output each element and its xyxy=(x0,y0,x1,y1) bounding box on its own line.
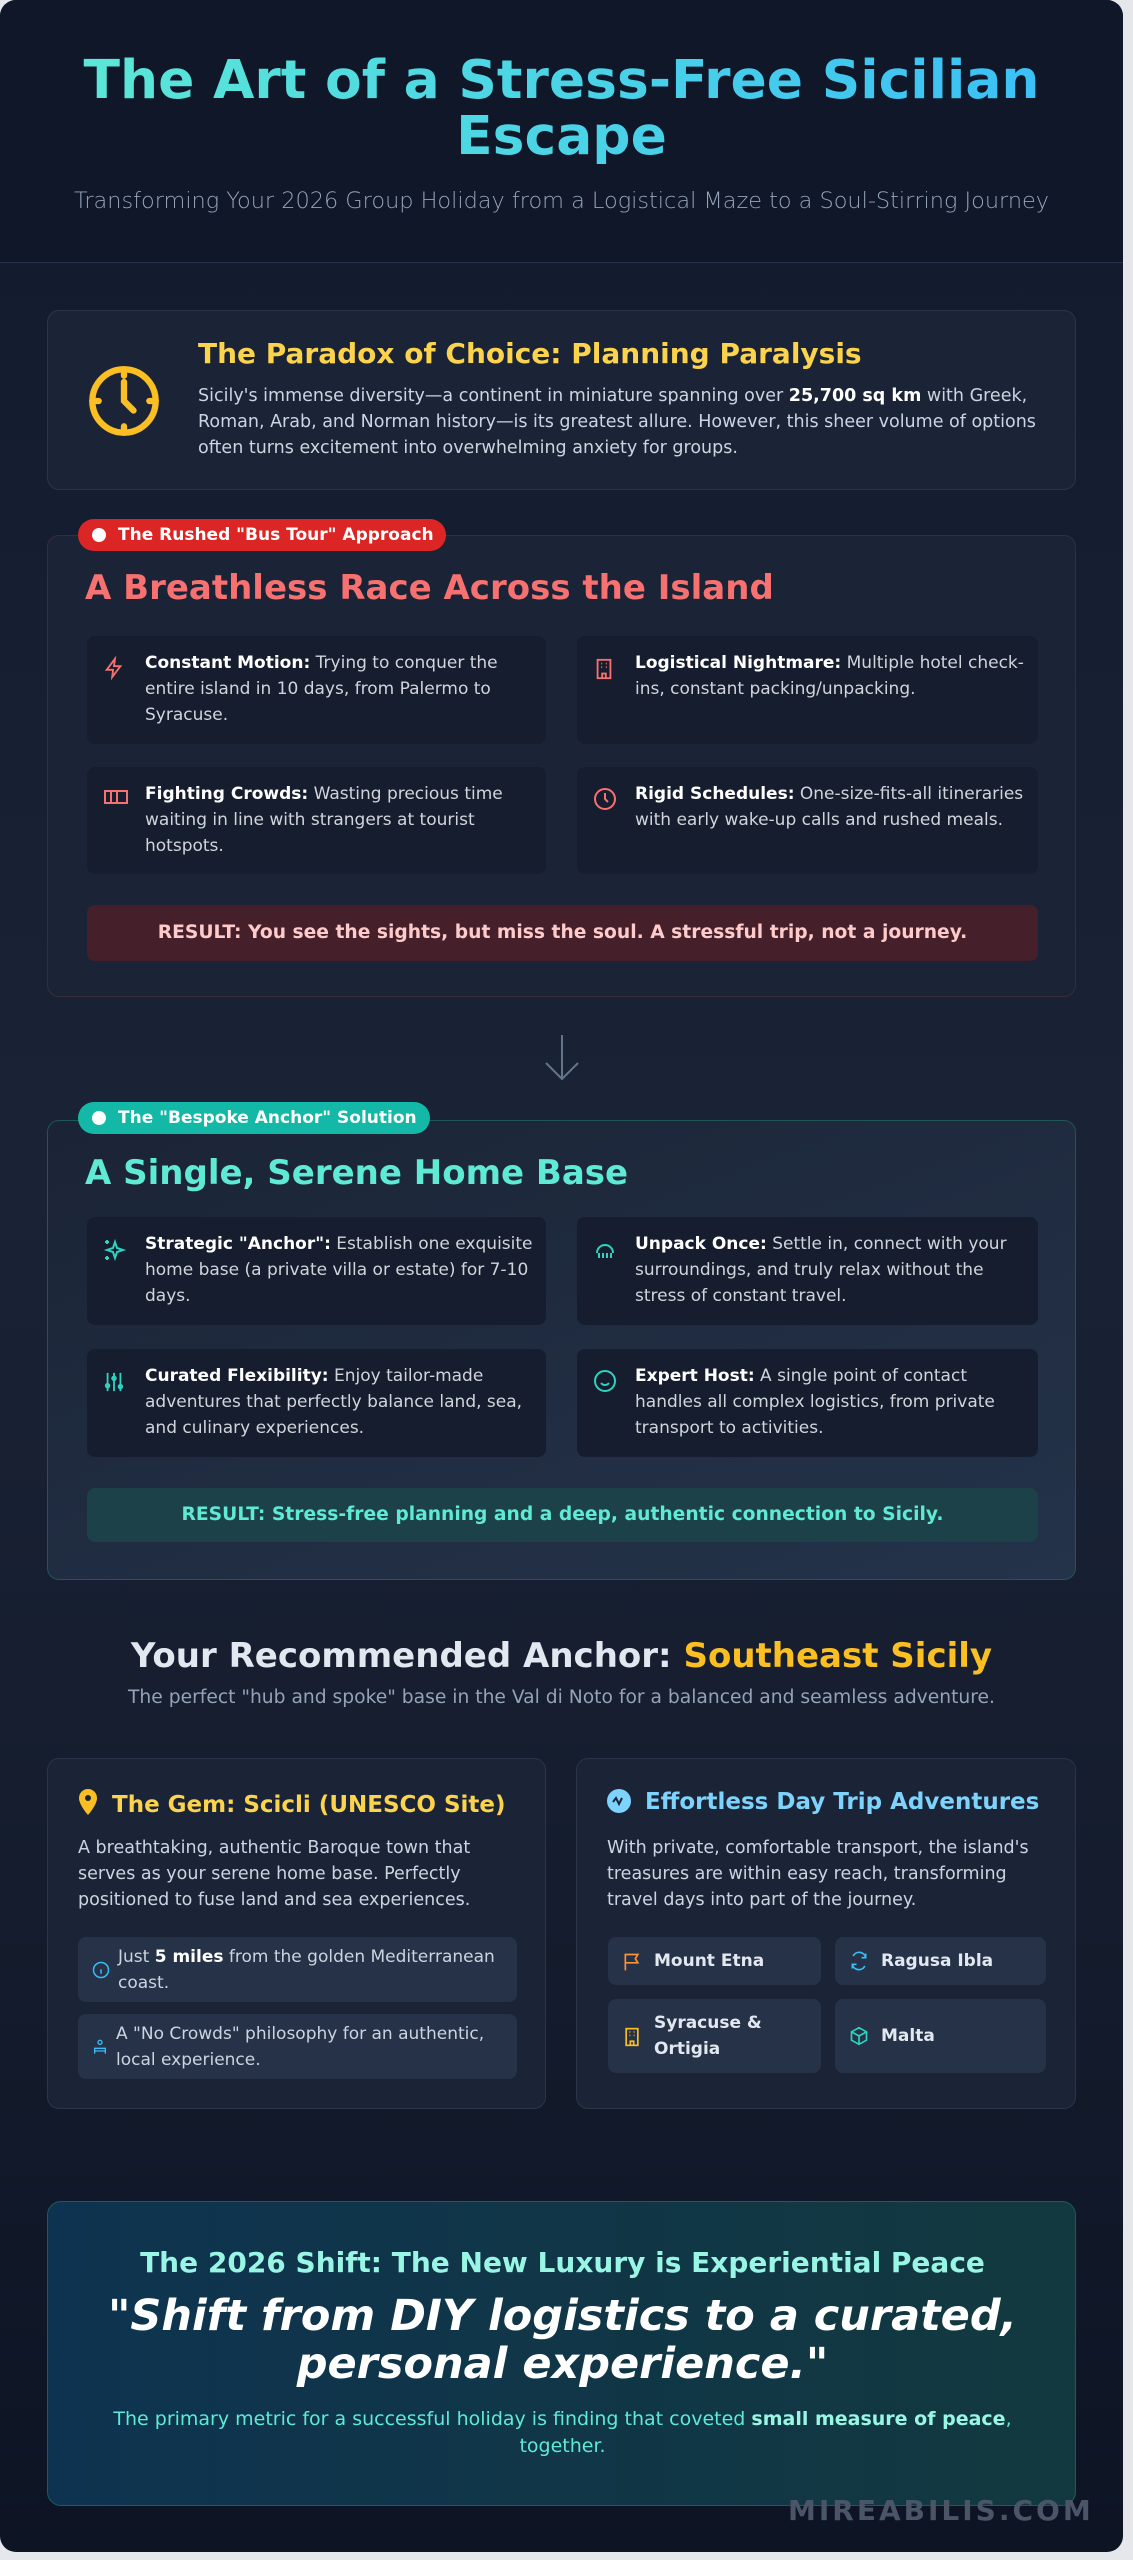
tile: mount etna: Mount Etna xyxy=(654,1951,764,1971)
title xyxy=(0,52,1123,164)
item: fighting crowds: Fighting Crowds: Wasting precious time waiting in line with strangers at tourist hotspots. xyxy=(145,784,503,856)
icon: sliders xyxy=(104,1372,124,1392)
icon: sparkles xyxy=(104,1239,126,1261)
quote: personal experience." xyxy=(297,2339,828,2389)
icon: bolt xyxy=(104,656,122,680)
item: strategic anchor: Strategic "Anchor": Establish one exquisite home base (a private villa or estate) for 7-10 days. xyxy=(145,1234,532,1306)
item: unpack once xyxy=(577,1217,1038,1325)
section heading: recommended anchor: Your Recommended Anchor: Southeast Sicily xyxy=(131,1636,992,1676)
panel: bus tour xyxy=(47,535,1076,997)
icon: clock xyxy=(594,788,616,810)
text: The primary metric for a successful holiday is finding that coveted small measure of peace, together. xyxy=(113,2408,1012,2457)
panel: the 2026 shift xyxy=(47,2201,1076,2506)
watermark: MIREABILIS.COM xyxy=(788,2494,1094,2527)
panel: day trips xyxy=(576,1758,1076,2109)
text: With private, comfortable transport, the island's treasures are within easy reach, transforming travel days into part of the journey. xyxy=(607,1838,1029,1910)
icon: ticket xyxy=(104,790,128,804)
result box: RESULT: You see the sights, but miss the soul. A stressful trip, not a journey. xyxy=(158,922,967,943)
tile: syracuse: Ortigia xyxy=(654,2039,720,2059)
icon: clock xyxy=(89,366,159,436)
fact: 5 miles: Just 5 miles from the golden Mediterranean coast. xyxy=(118,1947,495,1993)
heading: A Breathless Race Across the Island xyxy=(85,568,774,608)
badge: bus tour xyxy=(78,519,446,551)
tile: mount etna xyxy=(608,1937,821,1985)
item: expert host: Expert Host: A single point of contact handles all complex logistics, from private transport to activities. xyxy=(635,1366,995,1438)
title: Escape xyxy=(456,104,667,167)
arrow xyxy=(545,1035,579,1080)
icon: smile xyxy=(594,1370,616,1392)
fact: no crowds: A "No Crowds" philosophy for an authentic, local experience. xyxy=(116,2024,484,2070)
tile: malta xyxy=(835,1999,1046,2073)
item: strategic anchor xyxy=(87,1217,546,1325)
badge: bus tour: The Rushed "Bus Tour" Approach xyxy=(118,525,434,545)
tile: syracuse: Syracuse & xyxy=(654,2013,762,2033)
section subtitle: The perfect "hub and spoke" base in the Val di Noto for a balanced and seamless adventure. xyxy=(128,1687,995,1708)
item: constant motion: Constant Motion: Trying to conquer the entire island in 10 days, from Palermo to Syracuse. xyxy=(145,653,498,725)
subtitle: Transforming Your 2026 Group Holiday from a Logistical Maze to a Soul-Stirring Journey xyxy=(74,188,1049,214)
item: logistical nightmare xyxy=(577,636,1038,744)
item: curated flexibility: Curated Flexibility: Enjoy tailor-made adventures that perfectly balance land, sea, and culinary experiences. xyxy=(145,1366,522,1438)
header xyxy=(0,0,1123,263)
heading: The Gem: Scicli (UNESCO Site) xyxy=(112,1792,506,1818)
title: The Art of a Stress-Free Sicilian xyxy=(83,48,1040,111)
quote xyxy=(108,2291,1017,2389)
heading: A Single, Serene Home Base xyxy=(85,1153,628,1193)
item: unpack once: Unpack Once: Settle in, connect with your surroundings, and truly relax without the stress of constant travel. xyxy=(635,1234,1007,1306)
icon: building xyxy=(596,658,612,680)
badge: bespoke anchor xyxy=(78,1102,430,1134)
item: curated flexibility xyxy=(87,1349,546,1457)
icon: luggage xyxy=(596,1244,614,1258)
result box: RESULT: Stress-free planning and a deep, authentic connection to Sicily. xyxy=(182,1504,943,1525)
text: Sicily's immense diversity—a continent in miniature spanning over 25,700 sq km with Greek, Roman, Arab, and Norman history—is its greatest allure. However, this sheer volume of options often turns excitement into overwhelming anxiety for groups. xyxy=(198,386,1036,458)
panel: paradox of choice xyxy=(47,310,1076,490)
item: logistical nightmare: Logistical Nightmare: Multiple hotel check-ins, constant packing/unpacking. xyxy=(635,653,1024,699)
heading: Effortless Day Trip Adventures xyxy=(645,1789,1039,1815)
quote: "Shift from DIY logistics to a curated, xyxy=(108,2291,1017,2341)
tile: syracuse xyxy=(608,1999,821,2073)
panel: bespoke anchor xyxy=(47,1120,1076,1580)
item: rigid schedules: Rigid Schedules: One-size-fits-all itineraries with early wake-up calls and rushed meals. xyxy=(635,784,1023,830)
result box xyxy=(87,1488,1038,1542)
tile: ragusa ibla: Ragusa Ibla xyxy=(881,1951,993,1971)
item: fighting crowds xyxy=(87,767,546,874)
item: constant motion xyxy=(87,636,546,744)
tile: ragusa ibla xyxy=(835,1937,1046,1985)
heading: The Paradox of Choice: Planning Paralysis xyxy=(198,337,862,370)
fact: 5 miles xyxy=(78,1937,517,2002)
panel: the gem scicli xyxy=(47,1758,546,2109)
text: A breathtaking, authentic Baroque town that serves as your serene home base. Perfectly positioned to fuse land and sea experiences. xyxy=(78,1838,470,1910)
result box xyxy=(87,905,1038,961)
fact: no crowds xyxy=(78,2014,517,2079)
heading: The 2026 Shift: The New Luxury is Experiential Peace xyxy=(140,2246,985,2279)
item: expert host xyxy=(577,1349,1038,1457)
item: rigid schedules xyxy=(577,767,1038,874)
badge: bespoke anchor: The "Bespoke Anchor" Solution xyxy=(118,1108,417,1128)
tile: malta: Malta xyxy=(881,2026,935,2046)
